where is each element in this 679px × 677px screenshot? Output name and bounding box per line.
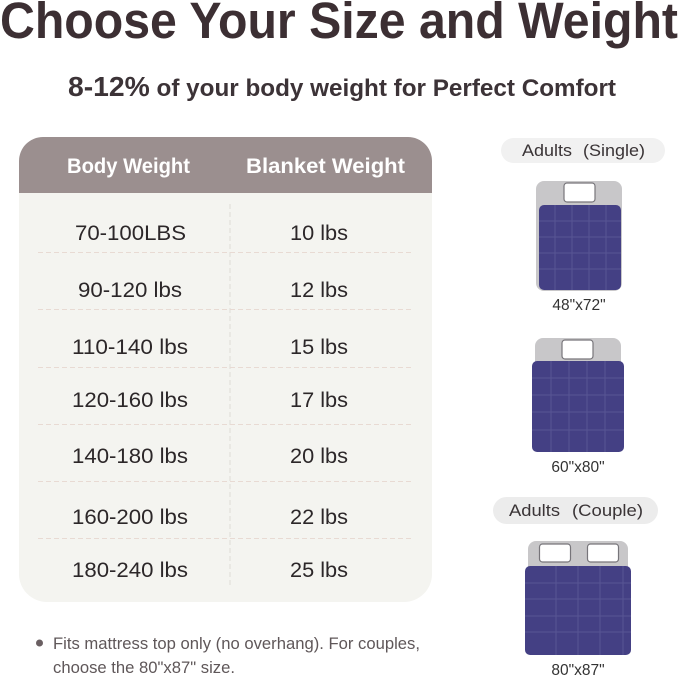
row: 120-160 lbs [72, 389, 348, 412]
label: Adults (Single): Adults [522, 141, 572, 160]
icon: full bed [532, 338, 624, 452]
row: 110-140 lbs: 15 lbs [290, 336, 348, 359]
footnote: Fits mattress top only (no overhang). For couples, [53, 635, 420, 653]
label: Adults (Single) [501, 138, 665, 163]
row: 90-120 lbs [78, 279, 348, 302]
label: Adults (Couple): Adults [509, 501, 560, 520]
label: Adults (Single): (Single) [583, 141, 645, 160]
size: 48x72: 48"x72" [552, 297, 606, 314]
row: 180-240 lbs: 180-240 lbs [72, 559, 188, 582]
table header: Blanket Weight [246, 155, 405, 178]
table header [19, 137, 432, 193]
panel: weight table [19, 137, 432, 602]
subtitle: 8-12% of your body weight for Perfect Comfort [68, 71, 616, 102]
label: Adults (Couple): (Couple) [572, 501, 643, 520]
row: 120-160 lbs: 120-160 lbs [72, 389, 188, 412]
row: 140-180 lbs: 140-180 lbs [72, 445, 188, 468]
row: 140-180 lbs [72, 445, 348, 468]
row: 160-200 lbs [72, 506, 348, 529]
row: 140-180 lbs: 20 lbs [290, 445, 348, 468]
table body [19, 192, 432, 602]
row: 110-140 lbs: 110-140 lbs [72, 336, 188, 359]
row: 180-240 lbs: 25 lbs [290, 559, 348, 582]
row: 70-100LBS [75, 222, 348, 245]
row: 180-240 lbs [72, 559, 348, 582]
row: 120-160 lbs: 17 lbs [290, 389, 348, 412]
icon: single bed [536, 181, 622, 291]
table header: Body Weight [67, 155, 190, 178]
row: 70-100LBS: 10 lbs [290, 222, 348, 245]
footnote: choose the 80"x87" size. [53, 659, 235, 677]
footnote [36, 635, 420, 677]
row: 70-100LBS: 70-100LBS [75, 222, 186, 245]
row: 90-120 lbs: 12 lbs [290, 279, 348, 302]
row: 160-200 lbs: 160-200 lbs [72, 506, 188, 529]
label: Adults (Couple) [493, 497, 658, 524]
row: 90-120 lbs: 90-120 lbs [78, 279, 182, 302]
row: 110-140 lbs [72, 336, 348, 359]
row: 160-200 lbs: 22 lbs [290, 506, 348, 529]
icon: couple bed [525, 541, 631, 655]
size: 60x80: 60"x80" [551, 459, 605, 476]
